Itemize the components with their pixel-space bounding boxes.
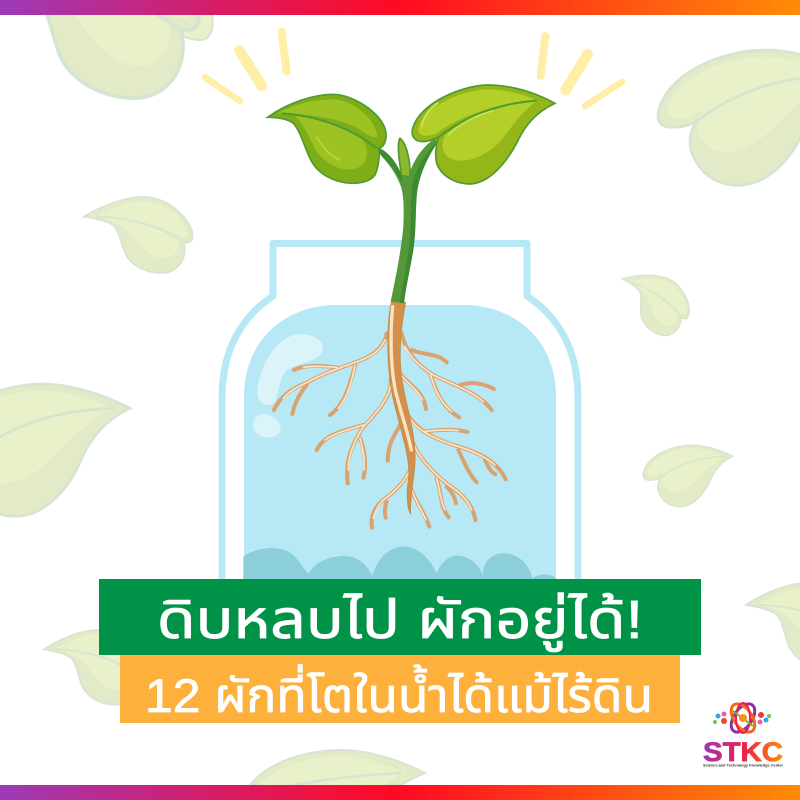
bottom gradient bar <box>0 785 800 800</box>
background leaf: top left <box>0 0 199 98</box>
stem left branch shade <box>377 148 402 183</box>
left leaf <box>268 94 386 183</box>
plant roots <box>274 301 506 528</box>
background leaf: left large <box>0 384 130 516</box>
background leaf: top left back lobe <box>150 10 213 40</box>
stem dark edge <box>400 139 439 303</box>
logo tagline: Science and Technology Knowledge Center <box>703 762 783 768</box>
pebbles at bottom of jar <box>243 547 556 590</box>
subtitle banner <box>120 655 680 723</box>
background leaf: bottom <box>250 750 425 785</box>
sun rays <box>205 32 622 106</box>
background leaf: lower right <box>746 583 800 668</box>
background leaf: right small <box>609 265 698 341</box>
root branches light core <box>283 340 495 520</box>
jar highlights <box>253 334 323 437</box>
glass jar outline <box>222 244 578 620</box>
top gradient bar <box>0 0 800 15</box>
taproot <box>388 301 415 514</box>
root branches outline <box>274 333 506 528</box>
background leaf: top right <box>658 50 800 185</box>
background leaf: upper left small <box>84 197 192 273</box>
right leaf <box>412 85 555 184</box>
taproot highlight <box>391 307 411 450</box>
title banner <box>99 579 701 655</box>
plant: stem and leaves <box>268 85 555 303</box>
subtitle banner: 12 ผักที่โตในน้ำได้แม้ไร้ดิน <box>145 664 653 722</box>
logo wordmark: STKC <box>703 737 783 767</box>
bud <box>398 138 410 177</box>
title banner: ดิบหลบไป ผักอยู่ได้! <box>157 590 643 652</box>
background leaf: lower left <box>44 630 144 705</box>
STKC logo <box>703 700 783 768</box>
water in jar <box>244 305 556 600</box>
stem <box>377 139 439 303</box>
background leaf: right middle <box>643 445 733 507</box>
logo atom icon <box>713 700 771 736</box>
